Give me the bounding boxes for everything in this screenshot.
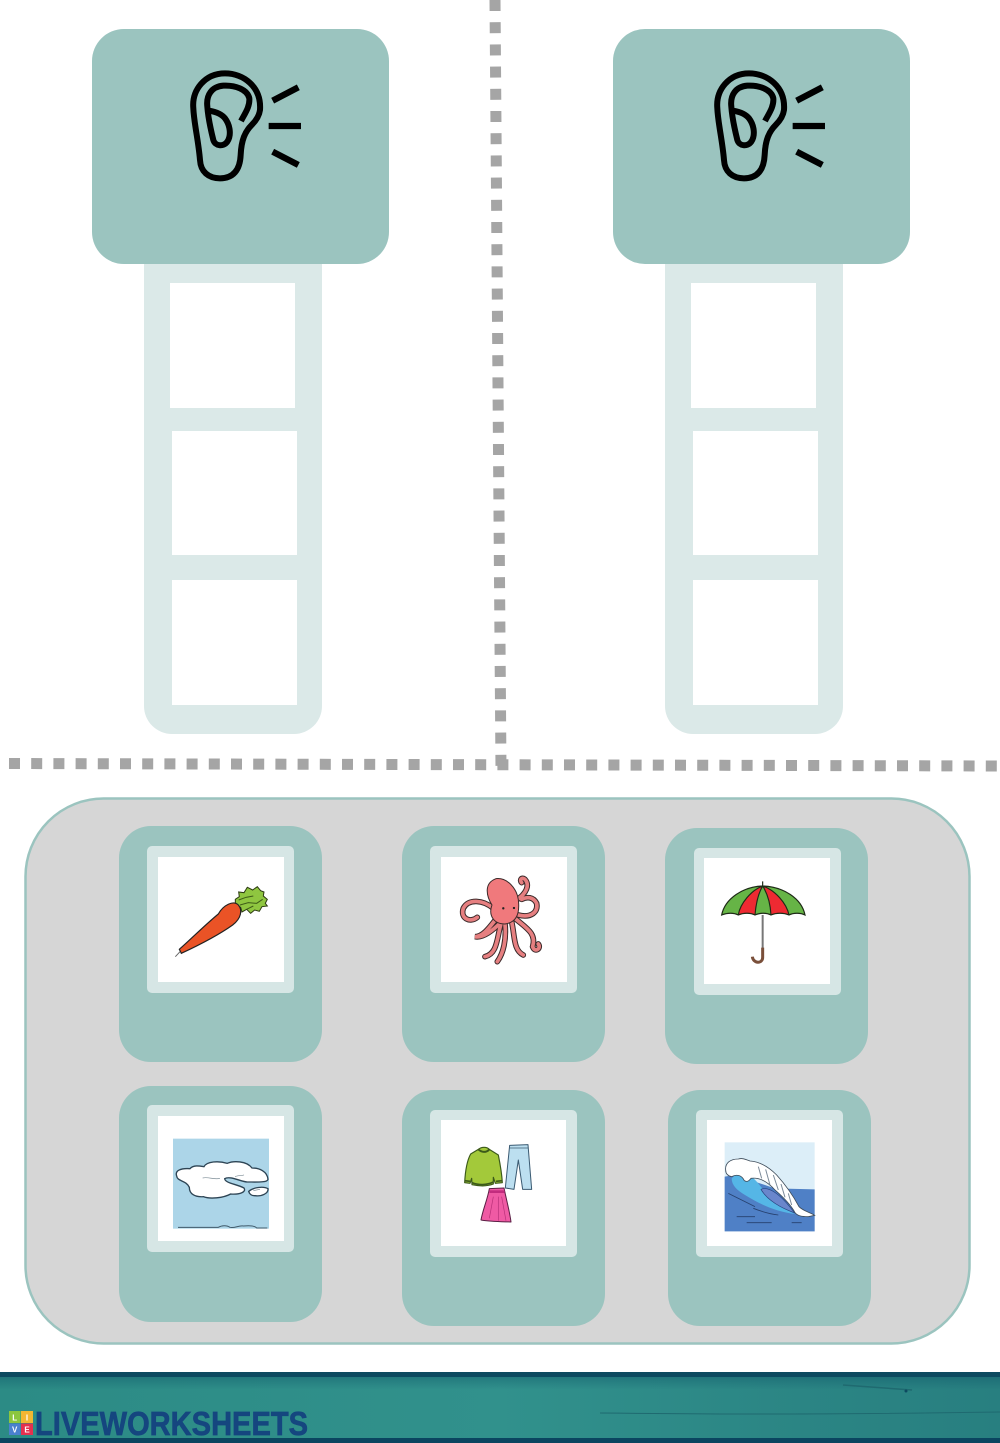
answer slot 3: [693, 580, 818, 705]
footer band: [0, 1372, 1000, 1443]
footer wordmark: LIVEWORKSHEETS: [35, 1405, 308, 1442]
horizontal dotted divider: [9, 764, 998, 766]
icon: umbrella: [722, 881, 805, 962]
icon: carrot: [175, 887, 267, 957]
answer slot 2: [693, 431, 818, 555]
card: clothes: [402, 1090, 605, 1326]
left header box: [92, 29, 389, 264]
column frame with three answer slots: [144, 250, 322, 734]
answer slot 1: [691, 283, 816, 408]
icon: octopus: [463, 878, 539, 962]
logo: LIVE colour tiles: E: [24, 1426, 30, 1434]
icon: clothes: [465, 1145, 532, 1222]
icon: ear with sound lines: [717, 73, 825, 178]
logo: LIVE colour tiles: L: [12, 1414, 17, 1422]
icon: ear with sound lines: [193, 73, 301, 178]
logo: LIVE colour tiles: V: [12, 1426, 18, 1434]
card: octopus: [402, 826, 605, 1062]
panel: left answer column: [92, 29, 389, 734]
panel: picture tray: [26, 798, 970, 1344]
answer slot 2: [172, 431, 297, 555]
logo: LIVE colour tiles: [9, 1411, 33, 1435]
card: cloud: [119, 1086, 322, 1322]
icon: ocean wave: [725, 1142, 815, 1231]
card: carrot: [119, 826, 322, 1062]
panel: right answer column: [613, 29, 910, 734]
card: umbrella: [665, 828, 868, 1064]
answer slot 3: [172, 580, 297, 705]
logo: LIVE colour tiles: I: [26, 1414, 28, 1422]
vertical dotted divider: [495, 0, 501, 770]
right header box: [613, 29, 910, 264]
answer slot 1: [170, 283, 295, 408]
icon: cloud in sky: [173, 1139, 269, 1229]
column frame with three answer slots: [665, 250, 843, 734]
card: wave: [668, 1090, 871, 1326]
